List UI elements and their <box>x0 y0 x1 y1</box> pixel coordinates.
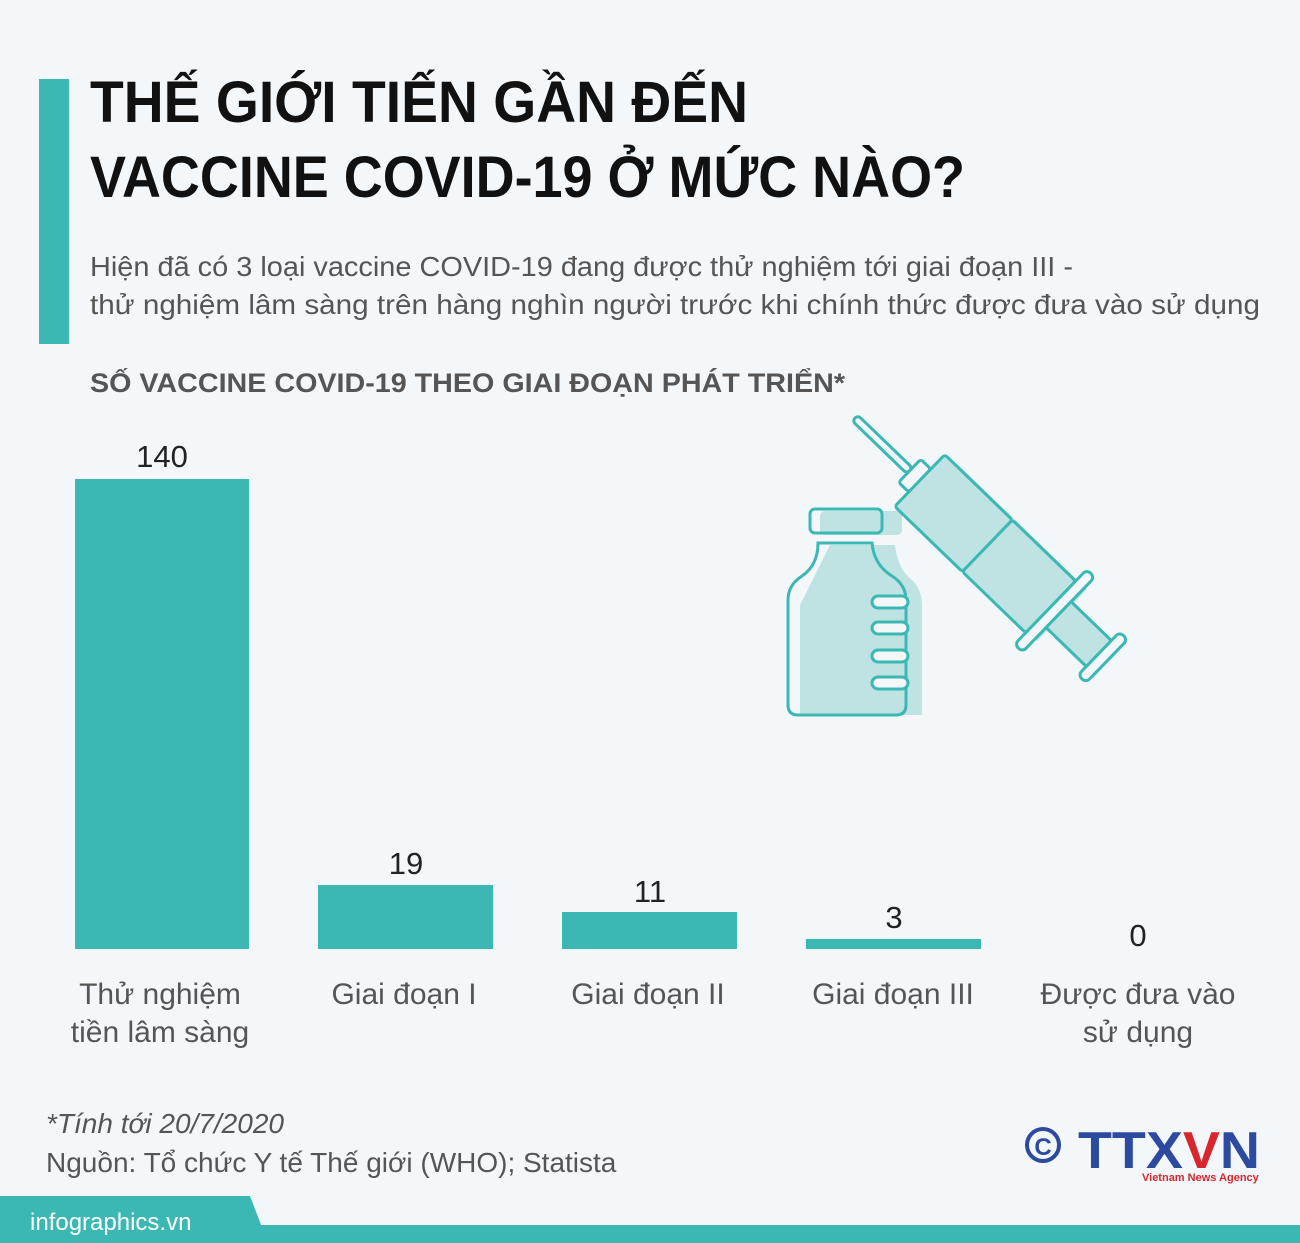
icon: vial <box>788 509 922 715</box>
bar chart: 140 <box>136 439 188 474</box>
bar chart: Được đưa vào <box>1041 978 1235 1011</box>
footnote <box>46 1108 617 1178</box>
bar chart <box>71 439 1235 1049</box>
footer band <box>0 1196 1300 1243</box>
subtitle: Hiện đã có 3 loại vaccine COVID-19 đang được thử nghiệm tới giai đoạn III - <box>90 251 1073 282</box>
subtitle <box>90 251 1260 320</box>
chart heading: SỐ VACCINE COVID-19 THEO GIAI ĐOẠN PHÁT TRIỂN* <box>90 366 846 398</box>
bar chart: 11 <box>634 874 666 909</box>
footnote: Nguồn: Tổ chức Y tế Thế giới (WHO); Statista <box>46 1147 617 1178</box>
bar chart: Giai đoạn III <box>812 978 974 1011</box>
title: VACCINE COVID-19 Ở MỨC NÀO? <box>90 145 965 210</box>
bar chart: 0 <box>1129 918 1147 953</box>
bar chart: 19 <box>389 846 423 881</box>
bar chart: tiền lâm sàng <box>71 1016 249 1049</box>
logo: TTXVN: Vietnam News Agency <box>1142 1172 1260 1184</box>
footnote: *Tính tới 20/7/2020 <box>46 1108 284 1139</box>
bar chart: sử dụng <box>1083 1016 1193 1049</box>
footer band: infographics.vn <box>30 1209 191 1236</box>
icon: syringe <box>819 381 1144 700</box>
title: THẾ GIỚI TIẾN GẦN ĐẾN <box>90 70 748 135</box>
bar chart: Giai đoạn II <box>571 978 725 1011</box>
accent bar <box>39 79 69 344</box>
subtitle: thử nghiệm lâm sàng trên hàng nghìn người trước khi chính thức được đưa vào sử dụng <box>90 289 1260 320</box>
bar chart: Giai đoạn I <box>331 978 477 1011</box>
bar chart: Thử nghiệm <box>79 978 241 1011</box>
bar chart: 3 <box>885 900 903 935</box>
logo: TTXVN: C <box>1034 1134 1052 1161</box>
title <box>90 70 965 210</box>
logo: TTXVN: TTXVN <box>1078 1122 1260 1180</box>
